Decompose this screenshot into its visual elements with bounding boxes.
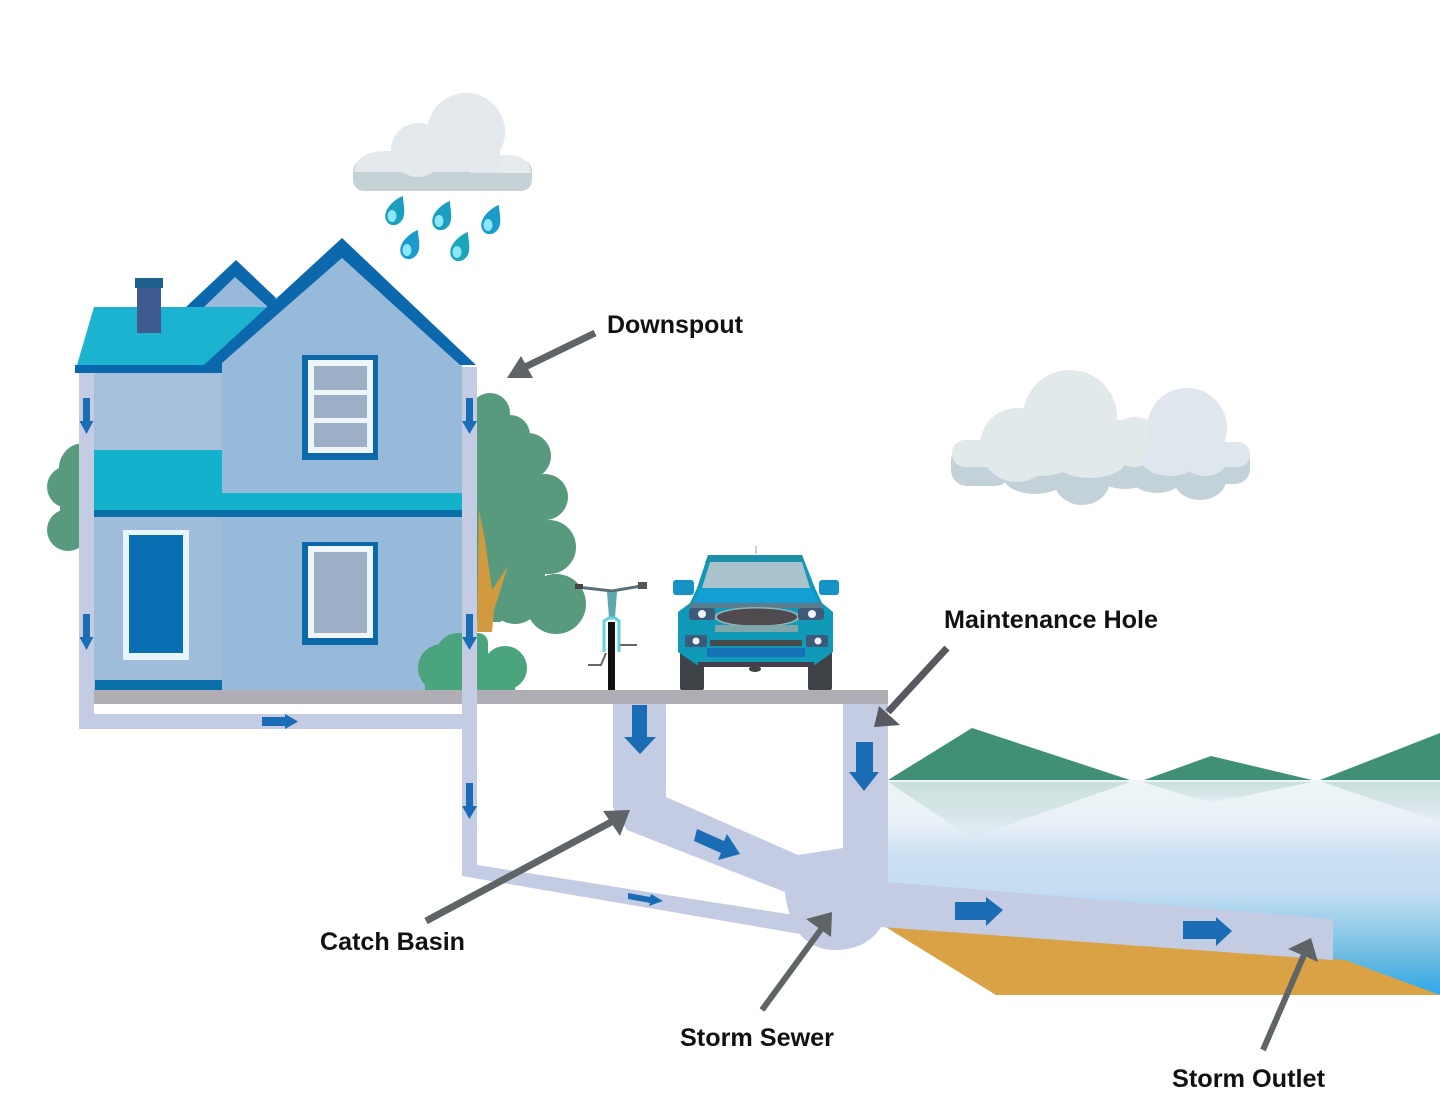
tow hook xyxy=(749,666,761,672)
dark floor band xyxy=(94,510,462,517)
right tree xyxy=(470,393,586,634)
tree trunk xyxy=(477,510,508,632)
label arrow: Downspout xyxy=(507,333,595,378)
label arrow: Storm Outlet xyxy=(1263,938,1318,1050)
flow arrows xyxy=(80,398,1232,946)
bush xyxy=(418,633,527,692)
catch basin, maintenance hole and storm sewer pipes xyxy=(613,704,1333,960)
chimney xyxy=(135,278,163,333)
lower grille xyxy=(710,640,802,646)
side mirrors xyxy=(673,580,839,595)
downspout and underground lateral pipes xyxy=(79,367,800,934)
headlights xyxy=(692,610,822,644)
house walls xyxy=(94,258,462,690)
sandy shore xyxy=(884,926,1440,995)
door xyxy=(123,530,189,660)
car xyxy=(673,546,839,690)
label: Maintenance Hole: Maintenance Hole xyxy=(944,606,1158,634)
grille xyxy=(714,607,800,627)
bicycle xyxy=(575,582,647,690)
distant green hills xyxy=(888,728,1440,780)
side roof xyxy=(77,307,268,365)
car body xyxy=(678,555,833,667)
roof band xyxy=(705,555,805,563)
bumper xyxy=(707,648,805,657)
wheels xyxy=(680,650,832,690)
large cloud xyxy=(951,370,1250,505)
small back gable xyxy=(186,260,276,310)
lower window xyxy=(302,542,378,645)
left tree xyxy=(47,443,109,551)
label: Downspout: Downspout xyxy=(607,311,744,339)
rain cloud xyxy=(353,93,532,191)
label arrow: Storm Sewer xyxy=(762,912,832,1010)
hood xyxy=(694,588,818,603)
label: Storm Sewer: Storm Sewer xyxy=(680,1024,834,1052)
upper window xyxy=(302,355,378,460)
label: Catch Basin: Catch Basin xyxy=(320,928,465,956)
rain drops xyxy=(385,196,500,261)
grille band xyxy=(715,625,798,632)
label arrow: Maintenance Hole xyxy=(874,648,947,727)
road surface xyxy=(94,690,888,704)
label arrow: Catch Basin xyxy=(426,810,630,921)
windshield xyxy=(702,562,810,588)
antenna xyxy=(755,546,757,554)
headlight housings xyxy=(685,608,828,647)
main gable roof xyxy=(75,238,476,373)
teal band xyxy=(94,450,462,510)
front step xyxy=(95,680,222,690)
label: Storm Outlet: Storm Outlet xyxy=(1172,1065,1326,1093)
hood edge xyxy=(690,603,822,608)
house xyxy=(75,238,476,690)
lake water xyxy=(884,780,1440,995)
